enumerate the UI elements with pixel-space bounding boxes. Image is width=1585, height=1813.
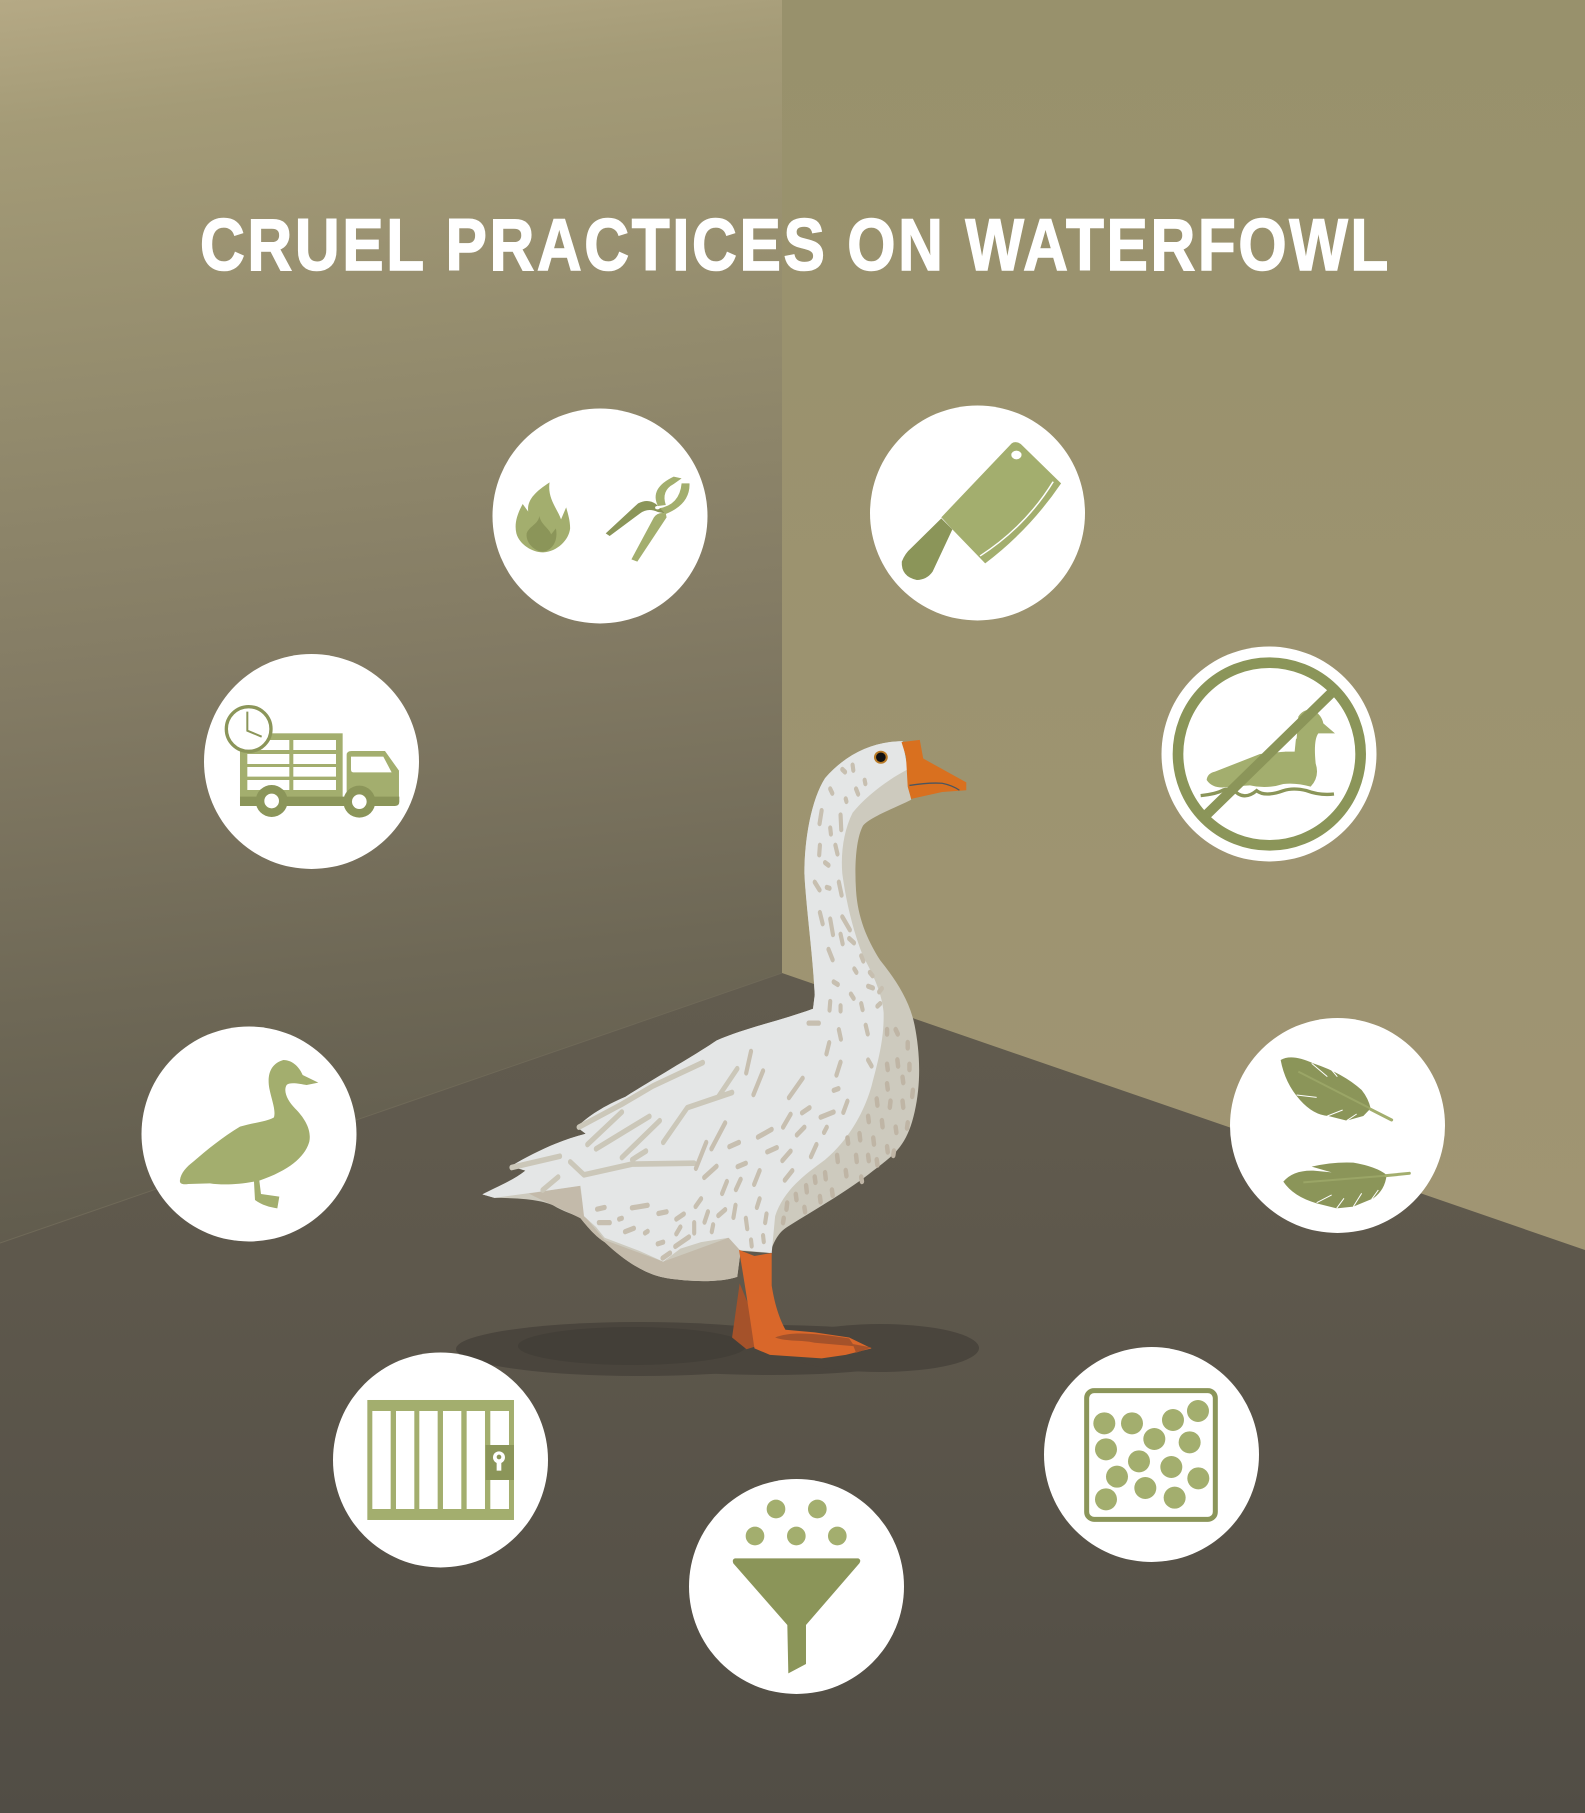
truck cab (240, 751, 399, 806)
cage lock (486, 1445, 514, 1480)
goose illustration (482, 740, 966, 1358)
icon circle: truck and clock (204, 654, 419, 869)
truck wheels (256, 785, 375, 818)
title: CRUEL PRACTICES ON WATERFOWL (200, 205, 1388, 286)
goose wing feathers (512, 1063, 737, 1190)
clock (226, 707, 271, 751)
goose beak (902, 740, 966, 799)
goose underbelly (529, 1186, 741, 1281)
goose shadow (456, 1322, 979, 1376)
goose eye (874, 751, 888, 764)
icon circle: cage (333, 1352, 548, 1568)
icon circle: cleaver (870, 406, 1085, 620)
goose body silhouette (482, 741, 919, 1281)
icon circle: no swimming duck (1162, 646, 1376, 862)
icon circle: fire and pliers (492, 408, 708, 624)
icon: bottom feather (1283, 1162, 1409, 1208)
icon: top feather (1281, 1057, 1392, 1121)
icon circle: feathers (1230, 1018, 1445, 1233)
icon: pliers (606, 477, 690, 562)
goose far leg (732, 1283, 756, 1349)
goose speckles (597, 765, 882, 1258)
goose chest speckles (783, 1030, 913, 1223)
truck cargo box (240, 733, 343, 798)
goose near leg and foot (739, 1250, 872, 1358)
icon: flame (516, 482, 570, 552)
icon circle: funnel (689, 1479, 904, 1694)
goose white plumage (482, 741, 908, 1262)
icon circle: duck silhouette (142, 1026, 356, 1242)
icon circle: pellets in box (1044, 1347, 1259, 1562)
